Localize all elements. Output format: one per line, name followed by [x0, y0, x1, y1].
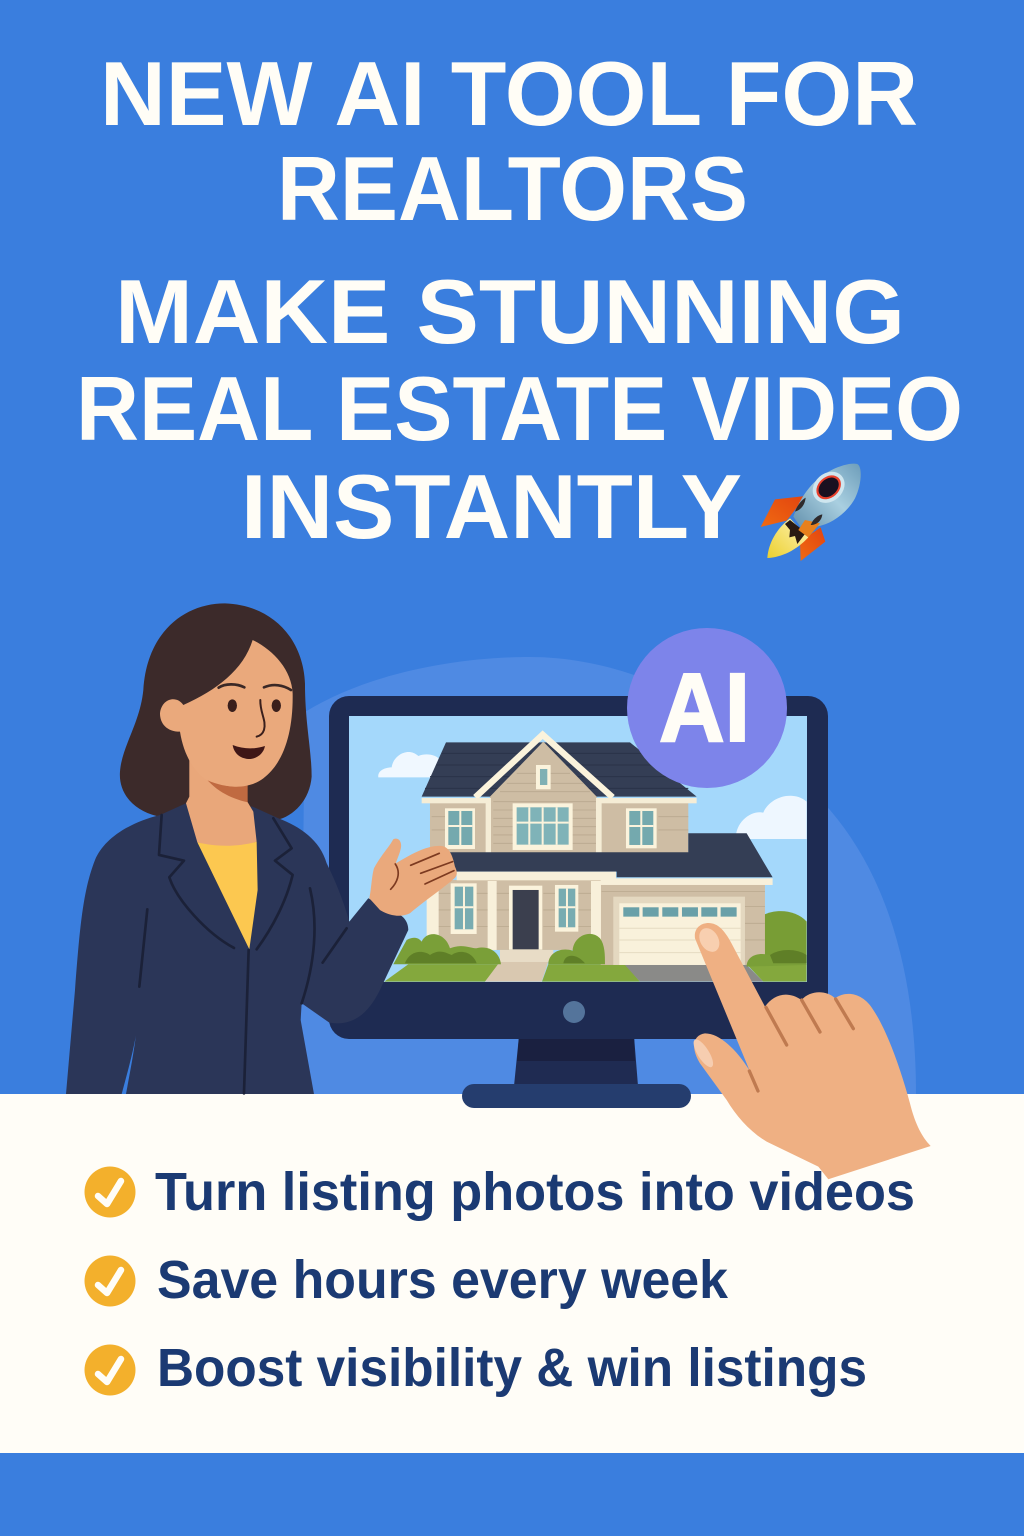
jacket lines: [139, 815, 347, 1093]
pointing hand: [690, 923, 931, 1179]
monitor: [329, 696, 828, 1108]
garage door: [613, 897, 745, 965]
facial features: [219, 684, 291, 759]
cloud right: [736, 796, 807, 839]
lower roof: [447, 833, 773, 877]
porch beam and columns: [427, 872, 773, 950]
AI badge: AI: [659, 653, 750, 762]
upper roof: [422, 742, 697, 797]
title: REAL ESTATE VIDEO: [76, 359, 963, 460]
right hill: [763, 911, 807, 963]
chin shadow: [202, 773, 248, 802]
benefit 2: Save hours every week: [157, 1250, 729, 1310]
title: NEW AI TOOL FOR: [100, 44, 918, 145]
background blob behind monitor: [300, 657, 916, 1094]
upper walls: [430, 742, 688, 853]
shrubs: [393, 934, 807, 967]
shirt: [197, 842, 258, 949]
lower walls: [438, 880, 765, 965]
title: [76, 44, 963, 558]
cloud left: [378, 752, 440, 777]
benefit 1: Turn listing photos into videos: [155, 1162, 915, 1222]
eaves and posts: [422, 798, 697, 855]
white benefits panel: [0, 1094, 1024, 1453]
title: REALTORS: [277, 139, 748, 240]
icon: rocket: [761, 464, 861, 561]
gable trim: [475, 735, 613, 797]
lower windows and door: [451, 883, 578, 962]
hair: [120, 603, 312, 820]
house on screen: [378, 735, 807, 982]
ground: [384, 962, 807, 982]
upper windows: [445, 765, 657, 850]
title: MAKE STUNNING: [115, 262, 905, 363]
benefit 3: Boost visibility & win listings: [157, 1338, 867, 1398]
jacket: [66, 803, 408, 1094]
neck: [186, 750, 257, 852]
realtor woman: [66, 603, 457, 1094]
title: INSTANTLY: [241, 457, 742, 558]
AI badge: [627, 628, 787, 788]
face: [160, 640, 293, 787]
presenting hand: [369, 839, 457, 916]
